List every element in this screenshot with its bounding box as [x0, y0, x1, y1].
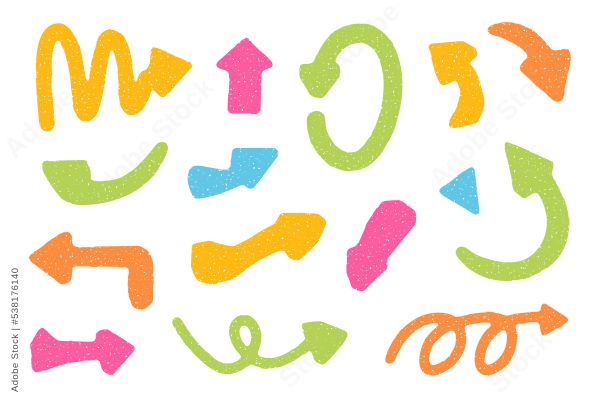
arrow: blue curved — [189, 149, 278, 198]
arrow: yellow squiggle — [44, 31, 191, 124]
arrow: orange curved down — [488, 24, 570, 101]
arrow: yellow up-left — [429, 42, 483, 128]
watermark: Adobe Stock — [422, 51, 566, 194]
arrow: orange spiral — [390, 304, 568, 371]
arrows set — [28, 24, 570, 375]
stock id label: Adobe Stock | #538176140 — [10, 268, 21, 392]
arrow: orange elbow — [28, 232, 152, 309]
arrow: green loop — [301, 33, 393, 162]
arrow: yellow wave — [192, 214, 326, 283]
arrow: pink up — [218, 40, 271, 111]
watermark: Adobe Stock — [77, 71, 221, 214]
arrow: green large curve — [456, 142, 568, 280]
arrow: green squiggle — [177, 320, 348, 369]
arrow: green swoosh — [43, 143, 167, 204]
arrow: pink down-left — [348, 201, 415, 290]
watermark: Stock — [482, 323, 558, 399]
arrow: blue triangle — [441, 169, 477, 213]
watermark: Stock — [272, 318, 348, 394]
arrow: pink right — [30, 327, 135, 375]
